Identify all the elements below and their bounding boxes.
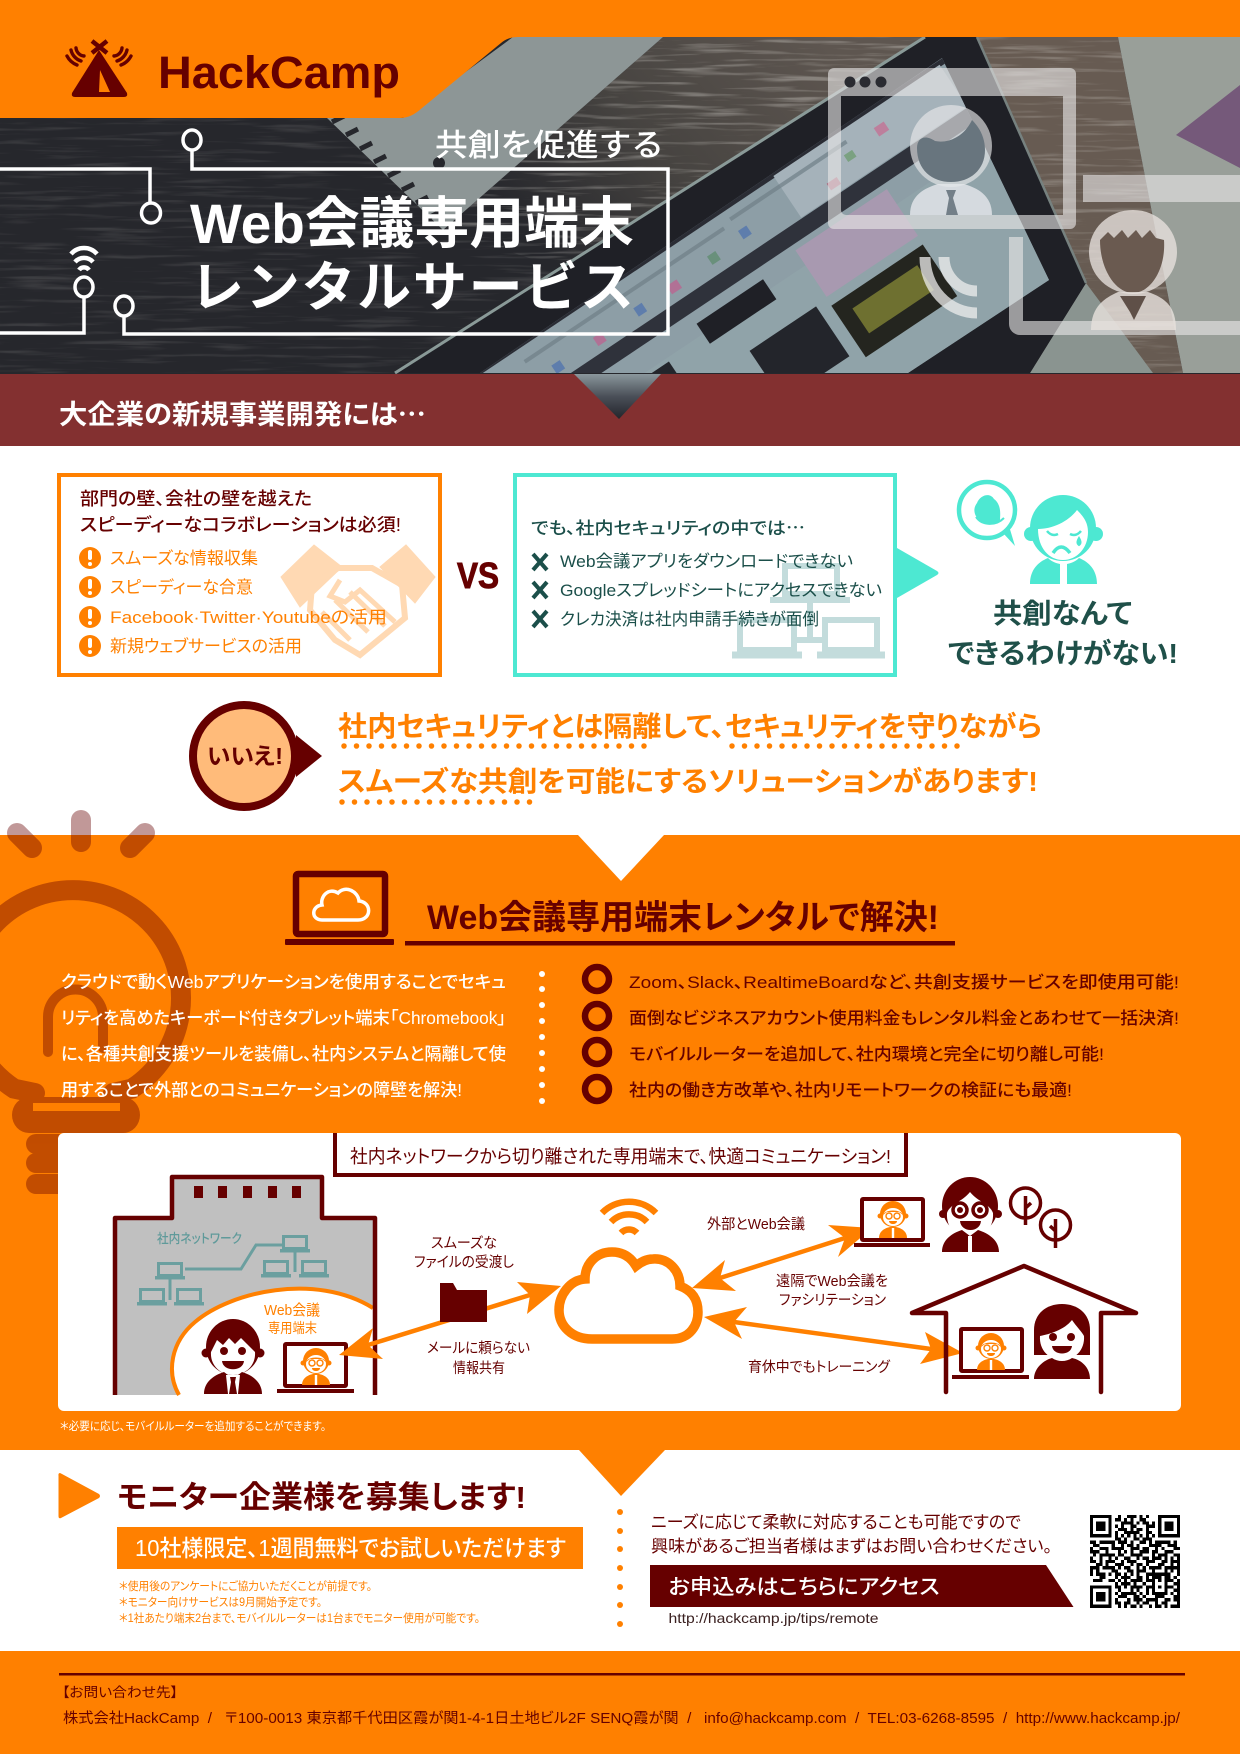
list: limits: Web会議アプリをダウンロードできない: [560, 552, 853, 571]
text: file exchange: メールに頼らない: [427, 1340, 530, 1357]
text: intro: 部門の壁、会社の壁を越えた: [80, 489, 312, 509]
icon: laptop with cloud: [285, 874, 394, 945]
internal network: [137, 1231, 329, 1306]
headline: solution exists: スムーズな共創を可能にするソリューションがあります!: [338, 765, 1038, 797]
icon: wifi on circuit: [71, 248, 97, 270]
hero circuit frame: [0, 130, 668, 334]
heading: monitor recruit: モニター企業様を募集します!: [117, 1480, 526, 1515]
icon: window dots: [844, 76, 886, 88]
text: monitor notes: ＊モニター向けサービスは9月開始予定です。: [119, 1595, 322, 1609]
top orange band: [0, 0, 1240, 37]
list: limits: Googleスプレッドシートにアクセスできない: [560, 581, 882, 600]
footer band: [0, 1651, 1240, 1754]
callout: iie bubble: いいえ!: [207, 743, 283, 769]
icon: home laptop: [952, 1329, 1029, 1379]
text: cannot co-create: できるわけがない!: [948, 637, 1178, 669]
panel: diagram: [58, 1133, 1181, 1411]
hero overlay icons: [828, 68, 1240, 335]
text: file exchange: ファイルの受渡し: [414, 1254, 515, 1271]
text: dedicated device: Web会議: [264, 1301, 320, 1319]
icon: house: [912, 1266, 1136, 1392]
list: limits: [533, 552, 882, 629]
icon: dedicated laptop: [277, 1344, 354, 1393]
list: needs: Facebook·Twitter·Youtubeの活用: [110, 608, 387, 627]
headline: solution exists: 社内セキュリティとは隔離して、セキュリティを守りながら: [338, 710, 1042, 742]
hero title: Web会議専用端末: [190, 192, 634, 255]
list: needs: [79, 547, 387, 657]
icon: second person: [1089, 210, 1177, 330]
text: url: http://hackcamp.jp/tips/remote: [668, 1610, 879, 1626]
icon: lower frame: [1009, 175, 1240, 335]
headline: solution exists: [338, 710, 1042, 802]
text: file exchange: [414, 1235, 530, 1377]
QR code: [1090, 1517, 1180, 1606]
icon: sad person with bubble: [959, 482, 1103, 584]
band heading: 大企業の新規事業開発には …: [59, 393, 426, 432]
list: benefits: 面倒なビジネスアカウント使用料金もレンタル料金とあわせて一括決済!: [629, 1009, 1179, 1028]
text: remote uses: 外部とWeb会議: [707, 1215, 805, 1233]
divider dots orange: [617, 1509, 623, 1627]
logo: [67, 41, 400, 98]
panel: security limits: [515, 475, 895, 675]
icon: cloud: [559, 1252, 698, 1339]
bar: monitor offer: [117, 1527, 583, 1569]
footer content: 株式会社HackCamp / 〒100-0013 東京都千代田区霞が関1-4-1日土地ビル2F SENQ霞が関 / info@hackcamp.com / TEL:03-6268-8595 / http://www.hackcamp.jp/: [63, 1710, 1181, 1727]
callout: iie bubble: [193, 705, 322, 807]
building: [115, 1177, 375, 1395]
panel: needs: [59, 475, 440, 675]
heading: solution: Web会議専用端末レンタルで解決!: [427, 899, 939, 937]
text: monitor notes: ＊使用後のアンケートにご協力いただくことが前提です。: [119, 1579, 372, 1593]
text: solution description: 用することで外部とのコミュニケーションの障壁を解決!: [61, 1080, 462, 1100]
arrow: cloud to home: [704, 1307, 963, 1364]
icon: handshake: [281, 545, 435, 655]
text: but: でも、社内セキュリティの中では …: [531, 514, 805, 539]
internal network: 社内ネットワーク: [157, 1231, 242, 1246]
text: contact prompt: 興味があるご担当者様はまずはお問い合わせください。: [651, 1537, 1052, 1556]
footer content: 【お問い合わせ先】: [62, 1685, 178, 1700]
text: dedicated device: 専用端末: [268, 1320, 317, 1336]
hero photo background: [0, 37, 1240, 374]
orange section: [0, 835, 1240, 1450]
list: limits: クレカ決済は社内申請手続きが面倒: [560, 610, 819, 629]
arrow: teal pointer: [897, 548, 938, 598]
text: solution description: クラウドで動くWebアプリケーションを使用することでセキュ: [61, 972, 506, 992]
list: benefits: Zoom、Slack、RealtimeBoardなど、共創支援サービスを即使用可能!: [629, 973, 1179, 992]
icon: person in window: [910, 105, 992, 215]
text: solution description: [61, 972, 506, 1100]
section notch orange: [579, 1450, 665, 1496]
list: benefits: 社内の働き方改革や、社内リモートワークの検証にも最適!: [629, 1081, 1072, 1100]
text: remote uses: 育休中でもトレーニング: [748, 1359, 891, 1376]
icon: folder: [440, 1283, 487, 1322]
icon: external laptop: [854, 1199, 930, 1247]
logo wordmark: HackCamp: [158, 47, 400, 98]
text: remote uses: [707, 1215, 891, 1376]
icon: wifi waves overlay: [925, 257, 977, 313]
notebook binding: [332, 116, 442, 217]
icon: office worker: [202, 1319, 264, 1394]
diagram caption: [335, 1133, 906, 1175]
text: contact prompt: [651, 1513, 1052, 1556]
list: needs: スピーディーな合意: [110, 577, 253, 597]
footnote: ＊必要に応じ、モバイルルーターを追加することができます。: [60, 1419, 326, 1433]
hero title: [190, 192, 634, 318]
text: contact prompt: ニーズに応じて柔軟に対応することも可能ですので: [651, 1513, 1021, 1532]
text: solution description: リティを高めたキーボード付きタブレット端末「Chromebook」: [61, 1008, 506, 1028]
arrow: device to cloud: [339, 1282, 561, 1359]
icon: orange arrow: [58, 1473, 100, 1518]
list: benefits: モバイルルーターを追加して、社内環境と完全に切り離し可能!: [629, 1045, 1104, 1064]
text: monitor notes: ＊1社あたり端末2台まで、モバイルルーターは1台までモニター使用が可能です。: [119, 1611, 480, 1625]
text: remote uses: 遠隔でWeb会議を: [776, 1272, 888, 1290]
icon: light bulb background: [0, 820, 181, 1184]
text: cannot co-create: [948, 598, 1178, 669]
band notch: [574, 374, 661, 419]
icon: trees: [1010, 1188, 1070, 1248]
text: cannot co-create: 共創なんて: [993, 598, 1132, 629]
divider dots: [539, 971, 545, 1104]
text: solution description: に、各種共創支援ツールを装備し、社内システムと隔離して使: [61, 1044, 506, 1064]
hero title: レンタルサービス: [190, 258, 634, 318]
banner: apply: [650, 1565, 1074, 1607]
diagram caption: 社内ネットワークから切り離された専用端末で、快適コミュニケーション!: [350, 1146, 891, 1167]
icon: wifi: [602, 1202, 656, 1233]
text: intro: [80, 489, 401, 535]
maroon band: [0, 374, 1240, 446]
text: monitor notes: [119, 1579, 480, 1625]
icon: tent logo: [67, 41, 131, 97]
icon: network faint: [732, 566, 885, 655]
list: benefits: [585, 967, 1179, 1101]
arrow: cloud to external: [692, 1225, 872, 1291]
footer content: [59, 1673, 1185, 1727]
VS label: VS: [457, 555, 499, 596]
hero subtitle: 共創を促進する: [435, 128, 664, 163]
icon: woman at home: [1034, 1304, 1090, 1379]
bar: monitor offer: 10社様限定、1週間無料でお試しいただけます: [135, 1535, 566, 1561]
text: remote uses: ファシリテーション: [779, 1293, 886, 1309]
icon: browser window frame: [828, 68, 1076, 229]
text: file exchange: 情報共有: [453, 1360, 505, 1377]
icon: external person with glasses: [939, 1177, 1002, 1252]
banner: apply: お申込みはこちらにアクセス: [668, 1576, 940, 1599]
list: needs: スムーズな情報収集: [110, 549, 258, 568]
text: intro: スピーディーなコラボレーションは必須!: [80, 514, 401, 535]
section notch: [578, 835, 664, 881]
text: dedicated device: [264, 1301, 320, 1336]
text: file exchange: スムーズな: [431, 1235, 497, 1252]
logo panel: [0, 30, 530, 118]
list: needs: 新規ウェブサービスの活用: [110, 636, 302, 656]
